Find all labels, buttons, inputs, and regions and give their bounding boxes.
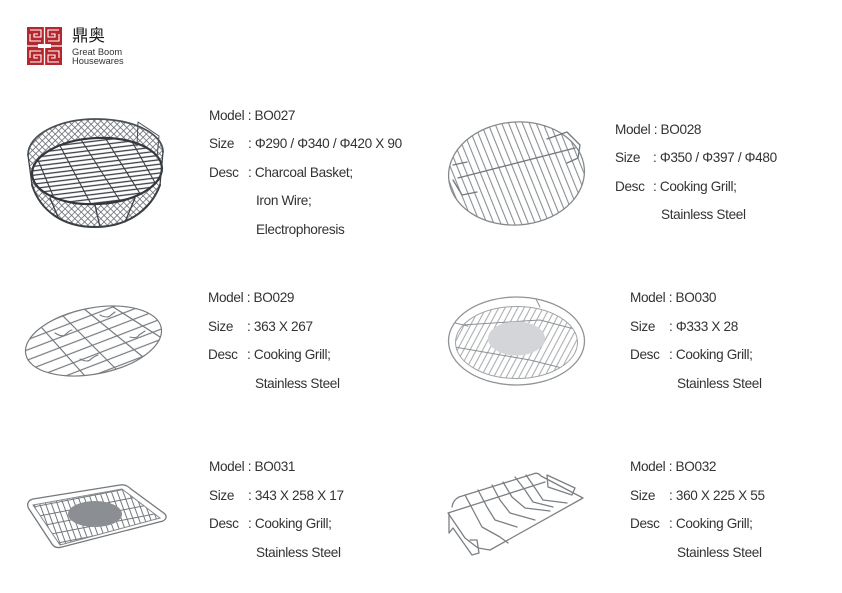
spec text: BO032: Stainless Steel [677,545,762,560]
product image: BO031 cooking grill with disc [25,485,170,550]
spec text: BO029: : Cooking Grill; [247,347,331,362]
logo: Great Boom Housewares: Housewares [72,56,124,66]
spec text: BO028: Stainless Steel [661,207,746,222]
logo English name: Great Boom [72,47,122,57]
grey disc [488,322,545,356]
spec text: BO029: Desc [208,347,238,362]
spec text: BO029: Model : BO029 [208,290,294,305]
spec text: BO032 [630,459,765,560]
spec text: BO028: Desc [615,179,645,194]
spec text: BO031: Stainless Steel [256,545,341,560]
spec text: BO030: : Cooking Grill; [669,347,753,362]
spec text: BO032: Desc [630,516,660,531]
spec text: BO030: Stainless Steel [677,376,762,391]
logo Chinese name: 鼎奥 [72,26,105,45]
logo mark [27,27,62,65]
product image: BO030 cooking grill with disc [448,297,585,385]
product image: BO028 cooking grill [448,121,586,226]
spec text: BO029 [208,290,340,391]
product image: BO032 roasting rack [448,473,583,555]
product image: BO027 charcoal basket [25,119,170,227]
spec text: BO030: Model : BO030 [630,290,717,305]
spec text: BO027: Iron Wire; [256,193,311,208]
spec text: BO032: Size [630,488,655,503]
spec text: BO032: : 360 X 225 X 55 [669,488,765,503]
spec text: BO028: Model : BO028 [615,122,701,137]
spec text: BO031: Model : BO031 [209,459,295,474]
product image: BO029 cooking grill [24,305,162,377]
spec text: BO031 [209,459,344,560]
spec text: BO028: Size [615,150,640,165]
spec text: BO028: : Φ350 / Φ397 / Φ480 [653,150,778,165]
spec text: BO029: : 363 X 267 [247,319,313,334]
spec text: BO030: Desc [630,347,660,362]
spec text: BO030: : Φ333 X 28 [669,319,738,334]
spec text: BO030 [630,290,762,391]
spec text: BO032: : Cooking Grill; [669,516,753,531]
spec text: BO031: Size [209,488,234,503]
spec text: BO028: : Cooking Grill; [653,179,737,194]
spec text: BO032: Model : BO032 [630,459,716,474]
spec text: BO027: : Charcoal Basket; [248,165,353,180]
spec text: BO031: Desc [209,516,239,531]
spec text: BO029: Stainless Steel [255,376,340,391]
grey disc [68,501,122,527]
spec text: BO027: Model : BO027 [209,108,295,123]
logo: Great Boom Housewares [27,26,124,66]
spec text: BO028 [615,122,778,222]
spec text: BO030: Size [630,319,655,334]
spec text: BO031: : 343 X 258 X 17 [248,488,344,503]
spec text: BO027: Electrophoresis [256,222,345,237]
spec text: BO031: : Cooking Grill; [248,516,332,531]
spec text: BO029: Size [208,319,233,334]
spec text: BO027: Desc [209,165,239,180]
spec text: BO027: : Φ290 / Φ340 / Φ420 X 90 [248,136,403,151]
spec text: BO027 [209,108,403,237]
spec text: BO027: Size [209,136,234,151]
